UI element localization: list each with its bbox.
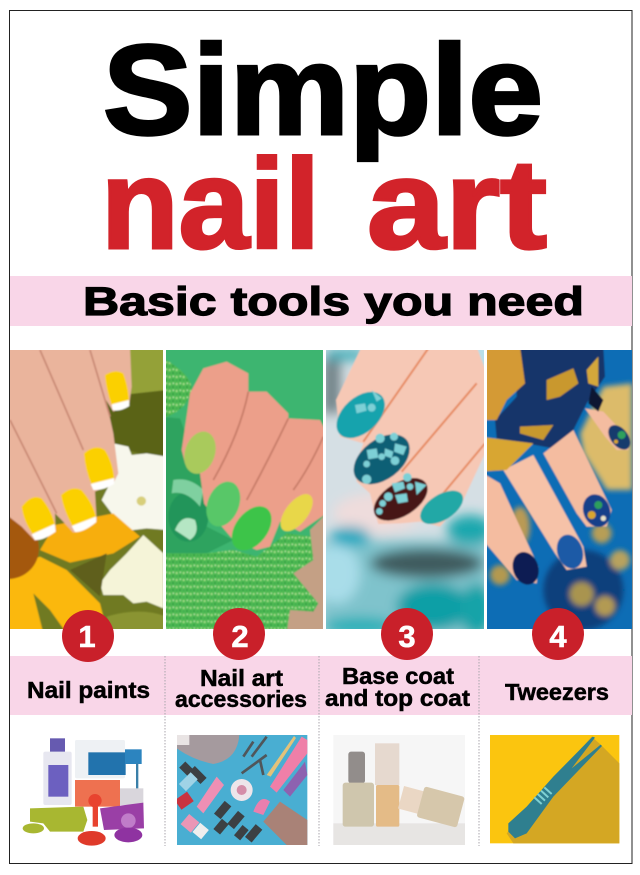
nail gems [355,390,427,515]
sunflower petals [40,513,140,563]
number badge 3 [381,608,433,660]
number badge 1: 1 [78,619,96,654]
label band 1-4 [10,656,632,715]
flowers [495,347,605,448]
illustration: tweezers on yellow [490,735,619,843]
nails [336,391,386,439]
label: Tweezers: Tweezers [505,679,609,705]
label: Nail art accessories [175,665,307,712]
hand [182,362,327,550]
number badge 4 [532,608,584,660]
subtitle band [10,276,632,326]
number badge 2: 2 [231,619,249,654]
label: Nail paints: Nail paints [27,677,150,703]
illustration: base coat and top coat bottles [333,735,465,845]
number badge 1 [62,610,114,662]
title: nail art: art [367,133,547,275]
photo panel 1: yellow nails [10,350,163,629]
rose [168,492,208,542]
column dividers [165,656,479,846]
number badge 4: 4 [549,619,567,654]
photo panel 3: teal nails [326,350,484,629]
nails [22,371,129,535]
fingers [585,408,630,450]
label: Nail art accessories: accessories [175,686,307,712]
number badge 2 [213,608,265,660]
title: nail art [101,133,547,275]
glitter [160,533,318,633]
title: Simple: Simple [103,19,543,162]
photo panel 2: green nails [160,347,327,633]
number badge 3: 3 [398,619,416,654]
label: Base coat and top coat: and top coat [325,685,470,711]
label: Base coat and top coat: Base coat [342,663,454,689]
photo panel 4: blue nails [487,350,632,629]
nails [607,424,632,450]
subtitle band: Basic tools you need [83,280,584,324]
hand [336,347,487,527]
illustration: nail art accessories flat lay [175,735,307,845]
label: Nail art accessories: Nail art [200,665,283,691]
label: Base coat and top coat [325,663,470,711]
nails [183,431,216,475]
hand [7,347,132,541]
illustration: nail paint bottles [23,738,144,846]
title: nail art: nail [101,133,320,275]
flowers [102,443,167,532]
